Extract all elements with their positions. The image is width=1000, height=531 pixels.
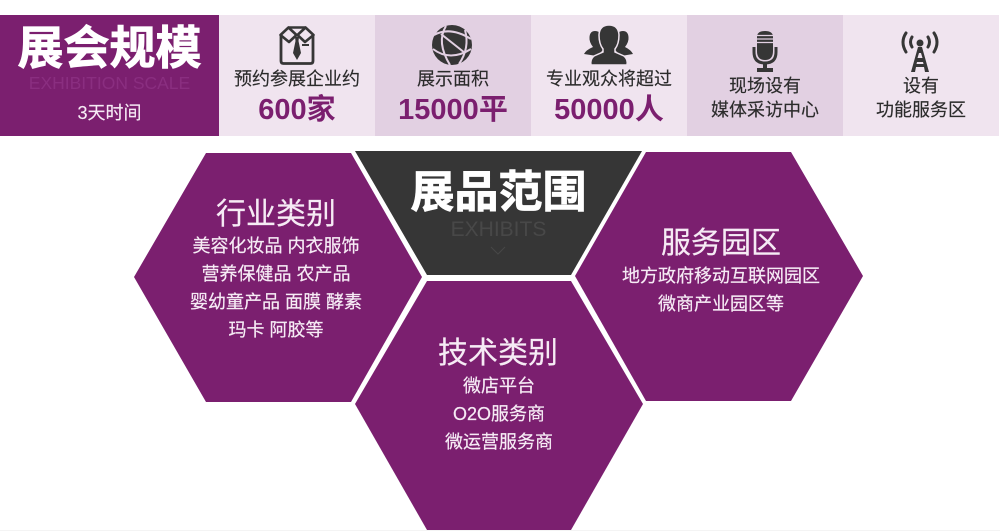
icon: shirt and tie: [279, 26, 315, 65]
panel: exhibition area: [375, 15, 531, 136]
panel: exhibitors: [219, 15, 375, 136]
panel: media center: [687, 15, 843, 136]
list: technology items: 微店平台: [463, 376, 535, 396]
number: 50000人: 50000人: [554, 94, 664, 126]
list: service park items: [622, 266, 820, 312]
label: 专业观众将超过: 专业观众将超过: [546, 69, 672, 89]
list: industry items: 玛卡 阿胶等: [228, 320, 324, 340]
panel: service park hexagon: [575, 152, 863, 401]
heading: 行业类别: 行业类别: [216, 198, 336, 231]
label: 现场设有 媒体采访中心: 媒体采访中心: [711, 100, 819, 120]
panel: exhibition scale header: [0, 15, 219, 136]
label: 现场设有 媒体采访中心: 现场设有: [729, 76, 801, 96]
icon: group of people: [584, 26, 633, 64]
list: technology items: 微运营服务商: [445, 432, 553, 452]
icon: antenna tower: [902, 31, 938, 72]
label: 预约参展企业约: 预约参展企业约: [234, 69, 360, 89]
number: 15000平: 15000平: [398, 94, 508, 126]
list: industry items: 婴幼童产品 面膜 酵素: [190, 292, 362, 312]
text: 3天时间: 3天时间: [77, 103, 142, 123]
list: service park items: 地方政府移动互联网园区: [622, 266, 820, 286]
panel: service area: [843, 15, 999, 136]
list: industry items: 美容化妆品 内衣服饰: [192, 236, 360, 256]
number: 600家: 600家: [258, 94, 336, 126]
subtitle: exhibition scale: EXHIBITION SCALE: [29, 73, 190, 93]
heading: 服务园区: 服务园区: [661, 227, 781, 260]
list: industry items: [190, 236, 362, 338]
heading: 展会规模: 展会规模: [18, 22, 202, 74]
label: 现场设有 媒体采访中心: [711, 76, 819, 120]
heading: 技术类别: 技术类别: [438, 337, 558, 370]
label: 设有 功能服务区: 设有: [903, 76, 939, 96]
subtitle: exhibits: EXHIBITS: [451, 218, 546, 241]
label: 设有 功能服务区: [876, 76, 966, 120]
icon: microphone: [752, 31, 778, 72]
label: 展示面积: 展示面积: [417, 69, 489, 89]
heading: 展品范围: 展品范围: [410, 168, 586, 217]
list: technology items: O2O服务商: [453, 404, 545, 424]
list: service park items: 微商产业园区等: [658, 294, 784, 314]
list: technology items: [445, 376, 552, 450]
panel: industry categories hexagon: [134, 153, 422, 402]
panel: exhibits heading trapezoid: [355, 151, 642, 275]
list: industry items: 营养保健品 农产品: [201, 264, 350, 284]
icon: globe network: [432, 25, 472, 65]
panel: professional visitors: [531, 15, 687, 136]
panel: technology categories hexagon: [355, 281, 643, 530]
icon: down chevron: [491, 247, 505, 254]
label: 设有 功能服务区: 功能服务区: [876, 100, 966, 120]
